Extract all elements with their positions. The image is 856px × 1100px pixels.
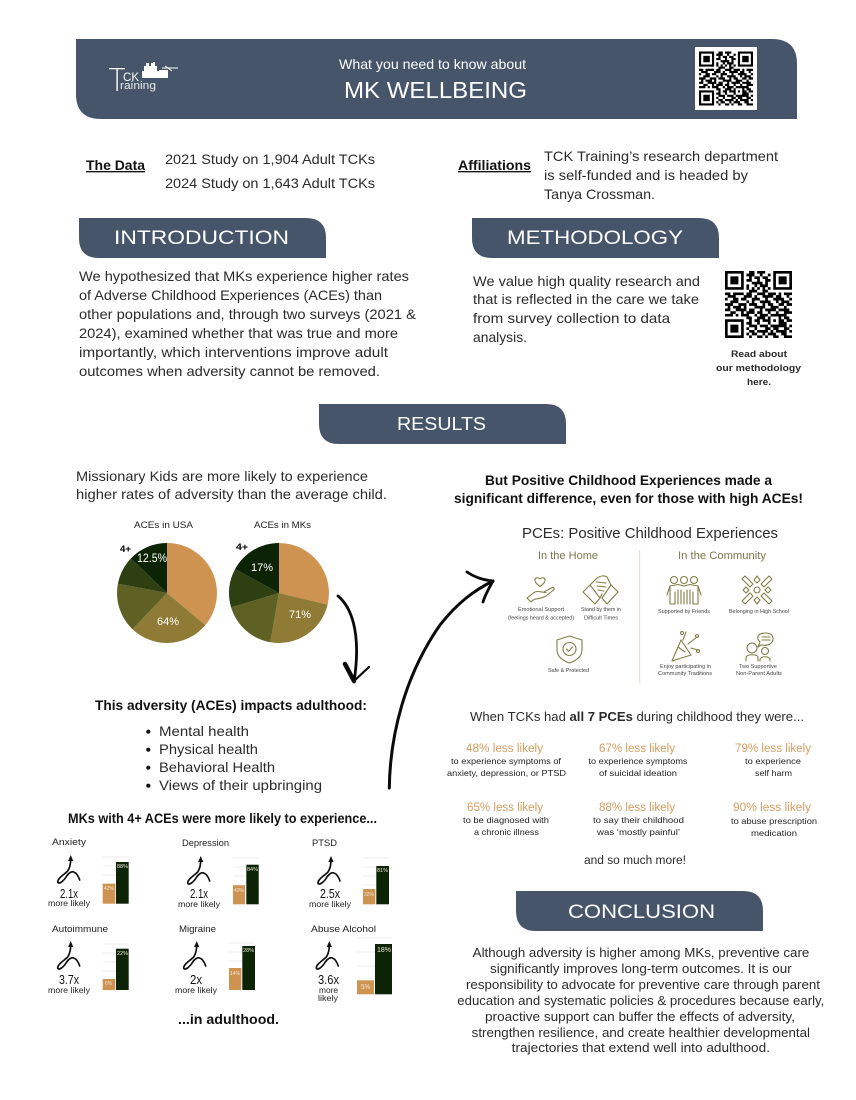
- chart: anxiety: 42%: [104, 886, 114, 892]
- chart: depression: 2.1x: [190, 886, 208, 901]
- stat: suicidal ideation 67%: 67% less likely: [599, 743, 675, 755]
- conclusion text: responsibility to advocate for preventive care through parent: [466, 977, 820, 992]
- methodology QR caption: [716, 349, 802, 388]
- arrow: adversity to PCEs: [389, 572, 493, 788]
- adversity intro text: [76, 468, 387, 502]
- stat: chronic illness 65%: [463, 802, 549, 837]
- chart: migraine: more likely: [175, 985, 218, 995]
- adulthood impact list: Physical health: [159, 741, 258, 757]
- icon: party popper: Community Traditions: [658, 671, 712, 677]
- icon: supportive adults: [736, 633, 782, 677]
- stat: suicidal ideation 67%: of suicidal ideation: [599, 768, 677, 778]
- methodology QR code: [725, 272, 792, 337]
- chart: PTSD: more likely: [309, 899, 352, 909]
- affiliations: [458, 148, 778, 202]
- chart: anxiety: 2.1x: [60, 886, 78, 901]
- heading: introduction: INTRODUCTION: [114, 227, 289, 249]
- pie chart: ACEs in USA: ACEs in USA: [134, 520, 194, 531]
- chart: migraine: 2x: [190, 972, 202, 987]
- icon: handshake: Stand by them in: [581, 607, 621, 613]
- methodology text: We value high quality research and: [473, 273, 700, 289]
- adulthood impact list: [146, 723, 322, 793]
- adversity intro text: Missionary Kids are more likely to experience: [76, 468, 368, 484]
- PCE intro text: significant difference, even for those with high ACEs!: [454, 491, 803, 506]
- chart: PTSD: PTSD: [312, 838, 337, 849]
- affiliations: is self-funded and is headed by: [544, 167, 748, 183]
- conclusion text: significantly improves long-term outcomes. It is our: [490, 961, 792, 976]
- affiliations: Affiliations: [458, 158, 531, 173]
- icon: handshake: [581, 576, 621, 622]
- icon: party popper: [658, 632, 712, 677]
- introduction text: other populations and, through two surveys (2021 &: [79, 306, 417, 322]
- the data: 2021 Study on 1,904 Adult TCKs: [165, 151, 375, 167]
- conclusion text: education and systematic policies & procedures because early,: [457, 993, 824, 1008]
- in the home label: In the Home: [538, 550, 598, 562]
- conclusion text: [457, 945, 824, 1055]
- stat: mostly painful 88%: to say their childhood: [593, 815, 684, 825]
- adversity intro text: higher rates of adversity than the average child.: [76, 486, 387, 502]
- chart: PTSD: 2.5x: [320, 886, 340, 901]
- pie chart: ACEs in MKs: 17%: [251, 562, 273, 574]
- chart: anxiety: [48, 837, 129, 908]
- pie chart: ACEs in MKs: [229, 520, 329, 643]
- heading: results: [319, 404, 566, 444]
- chart: depression: Depression: [182, 838, 229, 849]
- adulthood impact list: Mental health: [159, 723, 249, 739]
- stat: prescription medication 90%: medication: [751, 828, 797, 838]
- introduction text: outcomes when adversity cannot be removed.: [79, 363, 380, 379]
- chart: depression: [178, 838, 259, 909]
- chart: autoimmune: 6%: [105, 981, 112, 987]
- pie chart: ACEs in USA: 4+: [120, 544, 131, 555]
- icon: handshake: Difficult Times: [584, 616, 618, 622]
- stat: prescription medication 90%: [731, 802, 817, 838]
- stat: self harm 79%: self harm: [755, 768, 792, 778]
- chart: anxiety: more likely: [48, 898, 91, 908]
- the data: 2024 Study on 1,643 Adult TCKs: [165, 175, 375, 191]
- the data: [86, 151, 375, 191]
- stat: mostly painful 88%: [593, 802, 684, 837]
- icon: belonging: [729, 576, 789, 615]
- pie chart: ACEs in USA: 12.5%: [137, 553, 167, 565]
- stat: mostly painful 88%: 88% less likely: [599, 802, 675, 814]
- methodology text: that is reflected in the care we take: [473, 291, 699, 307]
- header QR code: [695, 47, 757, 110]
- chart: depression: more likely: [178, 899, 221, 909]
- affiliations: TCK Training’s research department: [544, 148, 778, 164]
- header eyebrow: What you need to know about: [339, 56, 526, 72]
- icon: emotional support: [508, 578, 574, 622]
- logo: CK: [123, 70, 139, 84]
- arrow: pies to adulthood impacts: [338, 596, 369, 682]
- chart: autoimmune: [48, 924, 129, 995]
- chart: depression: 40%: [234, 888, 244, 894]
- stat: suicidal ideation 67%: [588, 743, 688, 778]
- adulthood impact list: Views of their upbringing: [159, 777, 322, 793]
- conclusion text: Although adversity is higher among MKs, preventive care: [473, 945, 809, 960]
- chart: abuse alcohol: [311, 924, 392, 1003]
- stat: prescription medication 90%: 90% less likely: [733, 802, 811, 814]
- stat: anxiety 48%: to experience symptoms of: [451, 756, 562, 766]
- chart: migraine: 28%: [243, 948, 254, 954]
- pie chart: ACEs in MKs: 4+: [236, 542, 248, 553]
- chart: PTSD: 32%: [364, 892, 374, 898]
- chart: abuse alcohol: 18%: [377, 947, 391, 954]
- chart: abuse alcohol: 5%: [361, 984, 370, 991]
- icon: party popper: Enjoy participating in: [660, 664, 711, 670]
- introduction text: importantly, which interventions improve adult: [79, 344, 388, 360]
- heading: results: RESULTS: [397, 414, 486, 434]
- chart: anxiety: 88%: [117, 864, 128, 870]
- stat: self harm 79%: 79% less likely: [735, 743, 811, 755]
- icon: shield: Safe & Protected: [548, 668, 589, 674]
- chart: abuse alcohol: likely: [318, 993, 339, 1003]
- heading: methodology: METHODOLOGY: [507, 227, 683, 249]
- icon: emotional support: (feelings heard & accepted): [508, 616, 574, 622]
- icon: supported by friends: Supported by Friends: [658, 609, 710, 615]
- heading: conclusion: [516, 891, 763, 931]
- methodology text: from survey collection to data: [473, 310, 670, 326]
- chart: autoimmune: 3.7x: [59, 972, 79, 987]
- and so much more: and so much more!: [584, 855, 686, 867]
- icon: supportive adults: Non-Parent Adults: [736, 671, 782, 677]
- PCE intro text: [454, 473, 803, 506]
- introduction text: 2024), examined whether that was true and more: [79, 325, 398, 341]
- icon: shield: [548, 636, 589, 674]
- chart: autoimmune: 22%: [117, 951, 128, 957]
- all 7 PCEs heading: When TCKs had all 7 PCEs during childhood they were...: [470, 709, 804, 724]
- pie chart: ACEs in USA: [117, 520, 217, 643]
- chart: autoimmune: more likely: [48, 985, 91, 995]
- header banner: [76, 39, 797, 119]
- pie chart: ACEs in USA: 64%: [157, 616, 179, 628]
- introduction text: We hypothesized that MKs experience higher rates: [79, 268, 409, 284]
- in the community label: In the Community: [678, 550, 767, 562]
- methodology QR caption: here.: [747, 377, 771, 388]
- pie chart: ACEs in MKs: ACEs in MKs: [254, 520, 311, 531]
- logo: [109, 62, 178, 92]
- stat: chronic illness 65%: to be diagnosed with: [463, 815, 549, 825]
- stat: self harm 79%: to experience: [745, 756, 801, 766]
- introduction text: [79, 268, 417, 379]
- stat: anxiety 48%: anxiety, depression, or PTSD: [447, 768, 566, 778]
- PCE title: PCEs: Positive Childhood Experiences: [522, 526, 778, 542]
- chart: PTSD: 81%: [377, 868, 388, 874]
- icon: supportive adults: Two Supportive: [739, 664, 777, 670]
- introduction text: of Adverse Childhood Experiences (ACEs) than: [79, 287, 382, 303]
- header title: MK WELLBEING: [344, 77, 527, 103]
- methodology text: analysis.: [473, 329, 527, 345]
- chart: depression: 84%: [247, 867, 258, 873]
- methodology QR caption: our methodology: [716, 363, 802, 374]
- chart: migraine: Migraine: [179, 924, 216, 935]
- stat: anxiety 48%: 48% less likely: [466, 743, 543, 755]
- conclusion text: proactive support can buffer the effects of adversity,: [485, 1009, 795, 1024]
- chart: anxiety: Anxiety: [52, 837, 86, 848]
- the data: The Data: [86, 158, 146, 173]
- heading: conclusion: CONCLUSION: [568, 901, 715, 923]
- chart: autoimmune: Autoimmune: [52, 924, 108, 935]
- logo: raining: [120, 80, 156, 92]
- stat: chronic illness 65%: 65% less likely: [467, 802, 543, 814]
- conclusion text: strengthen resilience, and create healthier developmental: [472, 1025, 810, 1040]
- stat: chronic illness 65%: a chronic illness: [474, 827, 539, 837]
- heading: methodology: [472, 218, 719, 258]
- adulthood impact list: Behavioral Health: [159, 759, 275, 775]
- adulthood impact heading: This adversity (ACEs) impacts adulthood:: [95, 698, 367, 713]
- stat: self harm 79%: [735, 743, 811, 778]
- heading: introduction: [79, 218, 326, 258]
- stat: suicidal ideation 67%: to experience symptoms: [588, 756, 688, 766]
- in adulthood caption: ...in adulthood.: [178, 1012, 279, 1027]
- chart: abuse alcohol: Abuse Alcohol: [311, 924, 376, 935]
- PCE intro text: But Positive Childhood Experiences made a: [485, 473, 772, 488]
- icon: belonging: Belonging in High School: [729, 609, 789, 615]
- conclusion text: trajectories that extend well into adulthood.: [512, 1040, 770, 1055]
- affiliations: Tanya Crossman.: [544, 186, 655, 202]
- icon: emotional support: Emotional Support: [518, 607, 564, 613]
- icon: supported by friends: [658, 576, 710, 615]
- likelihood heading: MKs with 4+ ACEs were more likely to experience...: [68, 811, 377, 826]
- chart: migraine: 14%: [230, 971, 240, 977]
- stat: mostly painful 88%: was ‘mostly painful’: [596, 827, 680, 837]
- methodology text: [473, 273, 700, 345]
- chart: abuse alcohol: more: [319, 985, 338, 995]
- stat: anxiety 48%: [447, 743, 566, 778]
- stat: prescription medication 90%: to abuse prescription: [731, 816, 817, 826]
- chart: migraine: [175, 924, 255, 995]
- methodology QR caption: Read about: [731, 349, 788, 360]
- chart: abuse alcohol: 3.6x: [318, 972, 339, 987]
- chart: PTSD: [309, 838, 389, 909]
- pie chart: ACEs in MKs: 71%: [289, 609, 311, 621]
